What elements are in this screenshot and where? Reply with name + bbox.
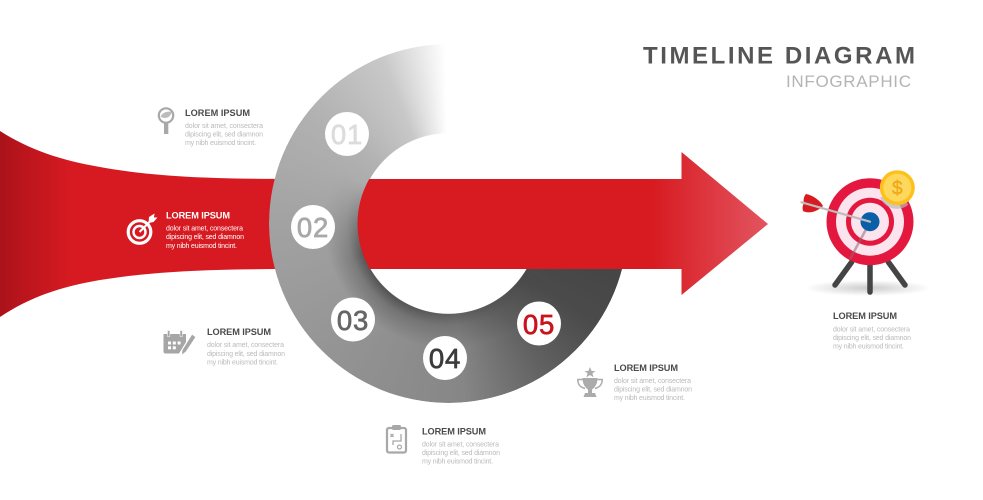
icon: magnifier: [159, 108, 173, 134]
dart: [802, 194, 870, 222]
icon: clipboard plan: [387, 425, 406, 452]
text block: step 02: [166, 211, 244, 250]
step 01: [325, 112, 369, 156]
ground shadow: [804, 280, 932, 296]
step 03: 03: [337, 305, 369, 336]
text block: step 03: dolor sit amet, consectera: [207, 342, 284, 349]
text block: step 05: dipiscing elit, sed diamnon: [614, 386, 692, 393]
text block: step 03: LOREM IPSUM: [207, 327, 271, 337]
text block: step 01: [185, 108, 263, 147]
text block: target: dipiscing elit, sed diamnon: [833, 335, 911, 342]
icon: white target with dart: [128, 214, 158, 243]
text block: step 03: dipiscing elit, sed diamnon: [207, 351, 285, 358]
text block: step 05: my nibh euismod tincint.: [614, 395, 685, 402]
text block: step 04: [422, 426, 500, 466]
icon: trophy with star: [578, 367, 602, 397]
coin shadow: [880, 197, 908, 209]
circular gradient ring: [269, 45, 622, 403]
step 02: [291, 205, 335, 249]
text block: step 02: LOREM IPSUM: [166, 211, 230, 221]
text block: step 04: my nibh euismod tincint.: [422, 459, 493, 466]
text block: step 03: [207, 327, 285, 366]
step 04: 04: [429, 343, 461, 374]
text block: step 02: my nibh euismod tincint.: [166, 243, 237, 250]
text block: step 01: LOREM IPSUM: [185, 108, 250, 118]
step 01: 01: [331, 119, 363, 150]
step 05: 05: [523, 309, 555, 340]
text block: target: my nibh euismod tincint.: [833, 344, 904, 350]
target rings: [826, 178, 914, 265]
text block: step 05: LOREM IPSUM: [614, 363, 678, 373]
gold coin: $: [892, 178, 903, 200]
step 02: 02: [297, 212, 329, 243]
text block: target: dolor sit amet, consectera: [833, 326, 910, 333]
title: [643, 43, 915, 91]
text block: step 01: dolor sit amet, consectera: [185, 123, 263, 130]
title: TIMELINE DIAGRAM: [643, 43, 915, 70]
text block: step 02: dolor sit amet, consectera: [166, 226, 243, 233]
text block: step 04: dipiscing elit, sed diamnon: [422, 450, 500, 457]
bullseye: [860, 212, 880, 231]
icon: bullseye target with coin and dart: [802, 170, 932, 296]
text block: step 04: dolor sit amet, consectera: [422, 442, 499, 448]
text block: target: [833, 311, 911, 350]
text block: step 01: dipiscing elit, sed diamnon: [185, 132, 263, 139]
text block: step 02: dipiscing elit, sed diamnon: [166, 234, 244, 241]
dart shadow: [850, 222, 870, 259]
big red arrow: [358, 152, 768, 295]
text block: step 04: LOREM IPSUM: [422, 426, 486, 436]
text block: step 05: dolor sit amet, consectera: [614, 378, 691, 385]
text block: target: LOREM IPSUM: [833, 311, 897, 321]
text block: step 03: my nibh euismod tincint.: [207, 359, 278, 366]
text block: step 01: my nibh euismod tincint.: [185, 140, 256, 147]
step 05: [517, 302, 561, 346]
title: INFOGRAPHIC: [786, 72, 911, 91]
step 03: [331, 298, 375, 342]
icon: calendar and pencil: [164, 330, 196, 356]
text block: step 05: [614, 363, 692, 402]
step 04: [423, 336, 467, 380]
tripod legs: [835, 262, 905, 292]
